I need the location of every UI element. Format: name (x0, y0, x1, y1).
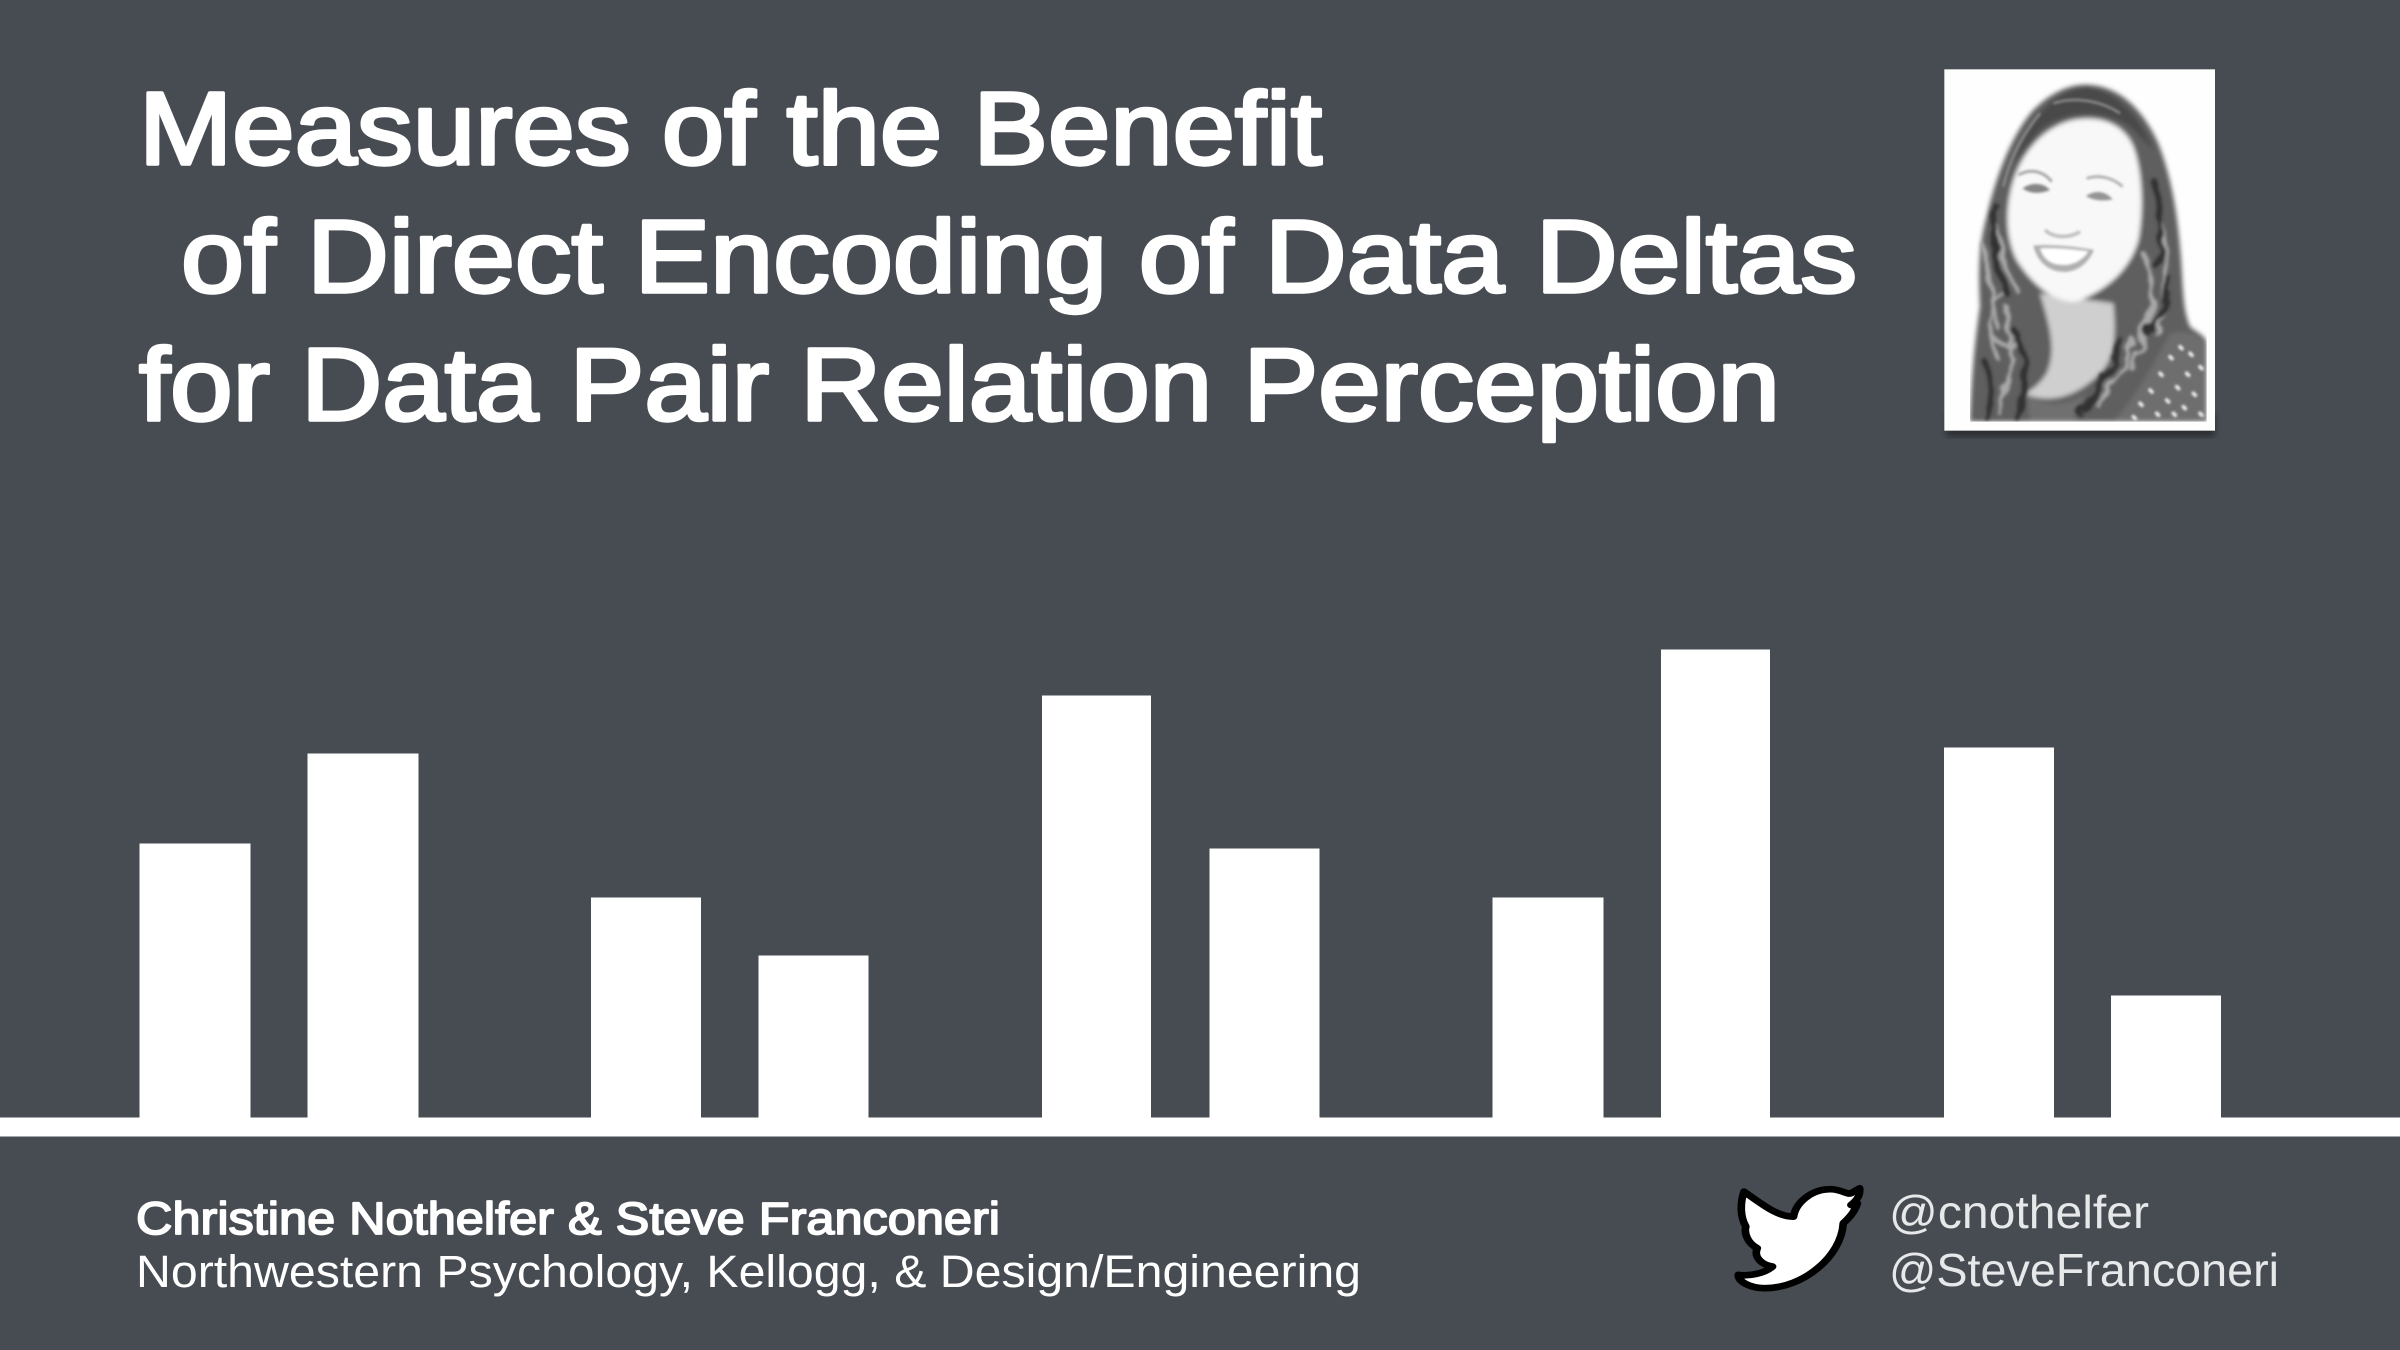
authors: Christine Nothelfer & Steve Franconeri (136, 1193, 1000, 1244)
title: of Direct Encoding of Data Deltas (181, 199, 1857, 314)
title: for Data Pair Relation Perception (139, 327, 1780, 442)
baseline (0, 1118, 2400, 1136)
twitter handles (1889, 1186, 2279, 1296)
icon: twitter bird (1738, 1188, 1860, 1288)
twitter handles: @SteveFranconeri (1889, 1244, 2279, 1296)
bar chart (140, 650, 2221, 1118)
title (139, 71, 1857, 442)
affiliations: Northwestern Psychology, Kellogg, & Design/Engineering (136, 1246, 1361, 1297)
portrait photo (1944, 69, 2215, 437)
twitter handles: @cnothelfer (1889, 1186, 2149, 1238)
title: Measures of the Benefit (139, 71, 1322, 186)
